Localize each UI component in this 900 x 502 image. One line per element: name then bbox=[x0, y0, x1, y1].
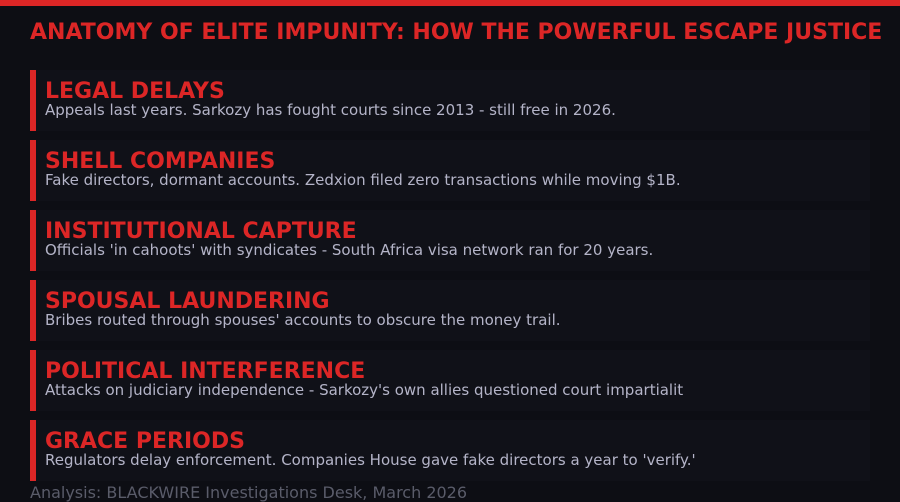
panel: spousal laundering: SPOUSAL LAUNDERING bbox=[45, 289, 330, 314]
panel: legal delays bbox=[30, 70, 870, 131]
panel: institutional capture: Officials 'in cahoots' with syndicates - South Africa visa network ran for 20 years. bbox=[45, 241, 653, 259]
panel: legal delays: LEGAL DELAYS bbox=[45, 79, 225, 104]
panel: political interference bbox=[30, 350, 870, 411]
panel: political interference: Attacks on judiciary independence - Sarkozy's own allies questioned court impartialit bbox=[45, 381, 683, 399]
panel: political interference: POLITICAL INTERFERENCE bbox=[45, 359, 365, 384]
panel: shell companies bbox=[30, 140, 870, 201]
panel: spousal laundering bbox=[30, 280, 870, 341]
panel: shell companies: SHELL COMPANIES bbox=[45, 149, 275, 174]
footer source: Analysis: BLACKWIRE Investigations Desk, March 2026 bbox=[30, 483, 467, 502]
panel: grace periods: Regulators delay enforcement. Companies House gave fake directors a year to 'verify.' bbox=[45, 451, 696, 469]
panel: institutional capture: INSTITUTIONAL CAPTURE bbox=[45, 219, 357, 244]
panel: shell companies: Fake directors, dormant accounts. Zedxion filed zero transactions while moving $1B. bbox=[45, 171, 681, 189]
panel: spousal laundering: Bribes routed through spouses' accounts to obscure the money trail. bbox=[45, 311, 561, 329]
panel: institutional capture bbox=[30, 210, 870, 271]
title: ANATOMY OF ELITE IMPUNITY: HOW THE POWERFUL ESCAPE JUSTICE bbox=[30, 20, 882, 45]
panel: legal delays: Appeals last years. Sarkozy has fought courts since 2013 - still free in 2026. bbox=[45, 101, 616, 119]
panel: grace periods bbox=[30, 420, 870, 481]
panel: grace periods: GRACE PERIODS bbox=[45, 429, 245, 454]
